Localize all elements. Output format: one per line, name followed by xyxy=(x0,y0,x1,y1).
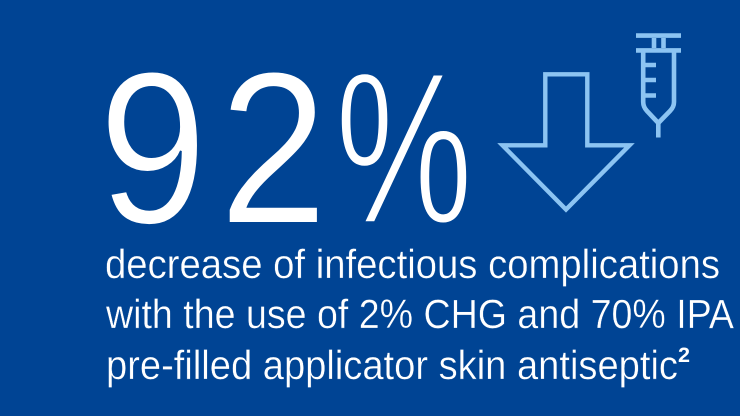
description text: 2 xyxy=(678,344,690,367)
icon: syringe xyxy=(636,36,681,138)
headline: 92%: % xyxy=(335,26,473,269)
headline: 92%: 9 xyxy=(98,26,207,269)
icon: down arrow xyxy=(502,74,630,210)
headline: 92%: 2 xyxy=(219,26,328,269)
description text xyxy=(105,241,735,388)
description text: pre-filled applicator skin antiseptic xyxy=(106,342,678,388)
headline: 92% xyxy=(98,26,473,269)
